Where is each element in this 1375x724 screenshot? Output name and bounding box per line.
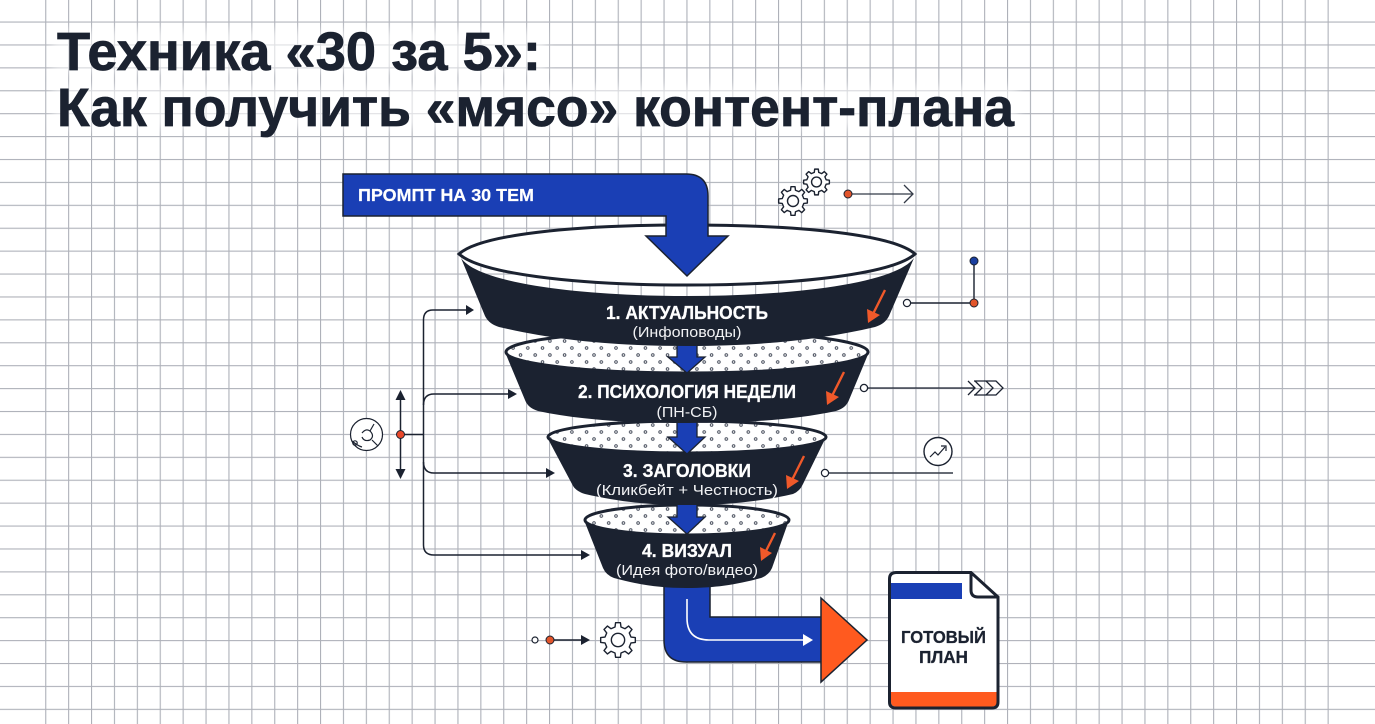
- title: Техника «30 за 5»:: [57, 22, 541, 82]
- document text: ПЛАН: [919, 647, 968, 667]
- arrow stage 1 to 2: [668, 340, 705, 373]
- icon: pair of gears: [779, 169, 829, 215]
- funnel stage 2: [505, 331, 869, 423]
- icon: circular swirl: [350, 418, 382, 450]
- connector with arrow top right: [844, 185, 913, 203]
- connector stage 3 with chart icon: [821, 438, 953, 477]
- stage 3 label: 3. ЗАГОЛОВКИ: [623, 460, 751, 481]
- funnel stage 1: [459, 225, 915, 346]
- arrow stage 2 to 3: [668, 415, 705, 454]
- stage 2 orange arrow: [826, 372, 844, 405]
- stage 2 sublabel: (ПН-СБ): [656, 404, 718, 421]
- stage 4 label: 4. ВИЗУАЛ: [642, 541, 732, 561]
- connector stage 1 nodes: [903, 257, 978, 307]
- stage 1 label: 1. АКТУАЛЬНОСТЬ: [606, 302, 768, 323]
- funnel stage 3: [547, 421, 826, 505]
- funnel stage 4: [584, 505, 789, 588]
- document blue bar: [891, 583, 962, 599]
- stage 3 sublabel: (Кликбейт + Честность): [596, 482, 778, 499]
- stage 1 sublabel: (Инфоповоды): [632, 324, 742, 341]
- left feedback connectors: [400, 305, 590, 560]
- document text: [901, 626, 986, 667]
- document: ready plan: [890, 572, 998, 708]
- title: [57, 22, 1015, 138]
- title: Как получить «мясо» контент-плана: [57, 78, 1015, 138]
- stage 4 sublabel: (Идея фото/видео): [616, 562, 758, 579]
- stage 3 orange arrow: [786, 456, 804, 489]
- connector with gear bottom: [532, 623, 635, 657]
- input prompt arrow: [343, 174, 728, 276]
- document text: ГОТОВЫЙ: [901, 626, 986, 647]
- vertical double arrow with node: [396, 390, 406, 479]
- document orange bar: [891, 692, 997, 706]
- connector stage 2 with chevrons: [860, 381, 1003, 395]
- stage 4 orange arrow: [760, 533, 775, 561]
- stage 2 label: 2. ПСИХОЛОГИЯ НЕДЕЛИ: [578, 381, 796, 402]
- stage 1 orange arrow: [867, 290, 885, 323]
- prompt label: ПРОМПТ НА 30 ТЕМ: [358, 185, 534, 205]
- output pipe arrow: [664, 585, 867, 682]
- white flow arrow: [687, 599, 813, 646]
- orange arrow head: [821, 598, 867, 682]
- arrow stage 3 to 4: [668, 500, 705, 534]
